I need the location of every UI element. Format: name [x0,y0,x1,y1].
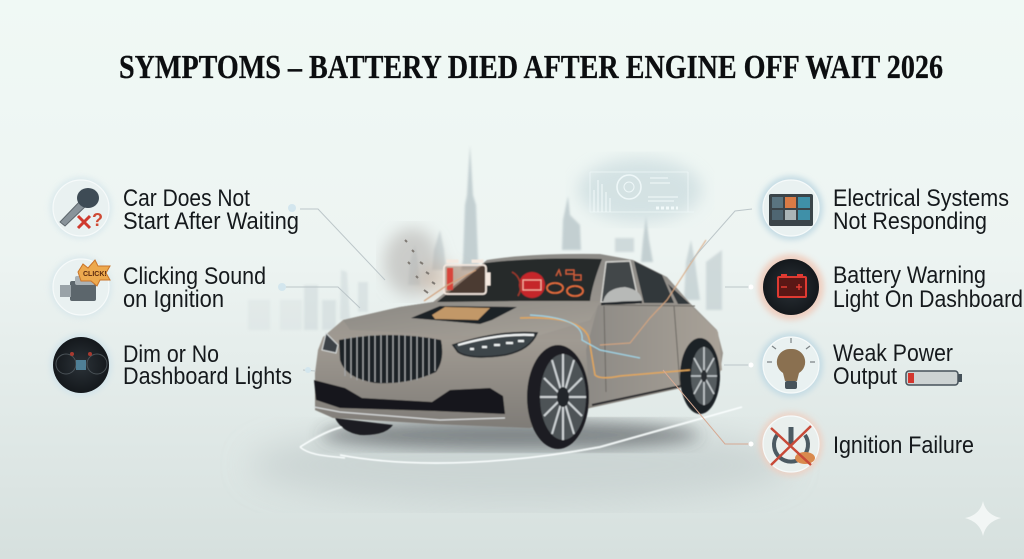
icon: car key with x and question mark [50,177,112,239]
side windows [601,261,639,303]
symptom: electrical systems [759,176,1009,240]
car shadow [320,420,700,450]
icon: starter motor with click burst: CLICK! [83,271,107,278]
mirror [603,287,642,303]
icon: sparkle watermark [965,501,1001,536]
dashboard warning lights [512,270,583,298]
symptom: battery warning light [758,254,1023,320]
wiring overlay [520,240,706,378]
front under-shadow [335,418,393,435]
label: Car Does Not [123,185,250,212]
side panel [586,305,722,406]
label: Dashboard Lights [123,363,292,390]
floor light ring [300,407,742,463]
floor shading [250,425,790,505]
sill [592,384,690,405]
label [833,185,1009,235]
battery hologram [444,260,490,294]
icon: low battery [906,371,962,385]
city skyline [248,145,722,330]
connector lines [283,209,752,444]
label: Not Responding [833,208,987,235]
windshield [437,258,602,302]
label [123,263,266,313]
symptom: car does not start [50,177,299,239]
label: Ignition Failure [833,432,974,459]
smoke behind the hood [384,228,462,296]
icon: infotainment screen [759,176,823,240]
car [300,240,742,463]
label [123,185,299,235]
label: on Ignition [123,286,224,313]
label [833,262,1023,313]
headlights [453,332,537,357]
symptom: weak power [759,333,962,397]
icon: car key with x and question mark: ? [92,210,103,230]
label: Output [833,363,897,390]
label: Electrical Systems [833,185,1009,212]
icon: crossed-out power symbol [759,412,823,476]
symptom: clicking sound [50,256,266,318]
label: Weak Power [833,340,953,367]
smoke particles [405,240,435,293]
lower bumper intakes [314,380,505,414]
label [833,340,953,390]
door lines [604,305,695,392]
label: Dim or No [123,341,219,368]
icon: starter motor with click burst [50,256,112,318]
grille [339,335,442,383]
symptom: ignition failure [759,412,974,476]
car body [315,254,723,428]
icon: dark instrument cluster [50,334,112,396]
front wheel [527,345,589,449]
label [123,341,292,390]
connector dots [278,204,754,446]
icon: dim light bulb [759,333,823,397]
icon: red battery light [758,254,824,320]
rear wheel [680,338,720,414]
label: Battery Warning [833,262,986,289]
symptom: dim dashboard [50,334,292,396]
sparks from battery [424,270,476,301]
holographic data panel [578,158,702,222]
engine bay [411,306,517,324]
label: Clicking Sound [123,263,266,290]
hood [343,300,600,338]
label: Start After Waiting [123,208,299,235]
